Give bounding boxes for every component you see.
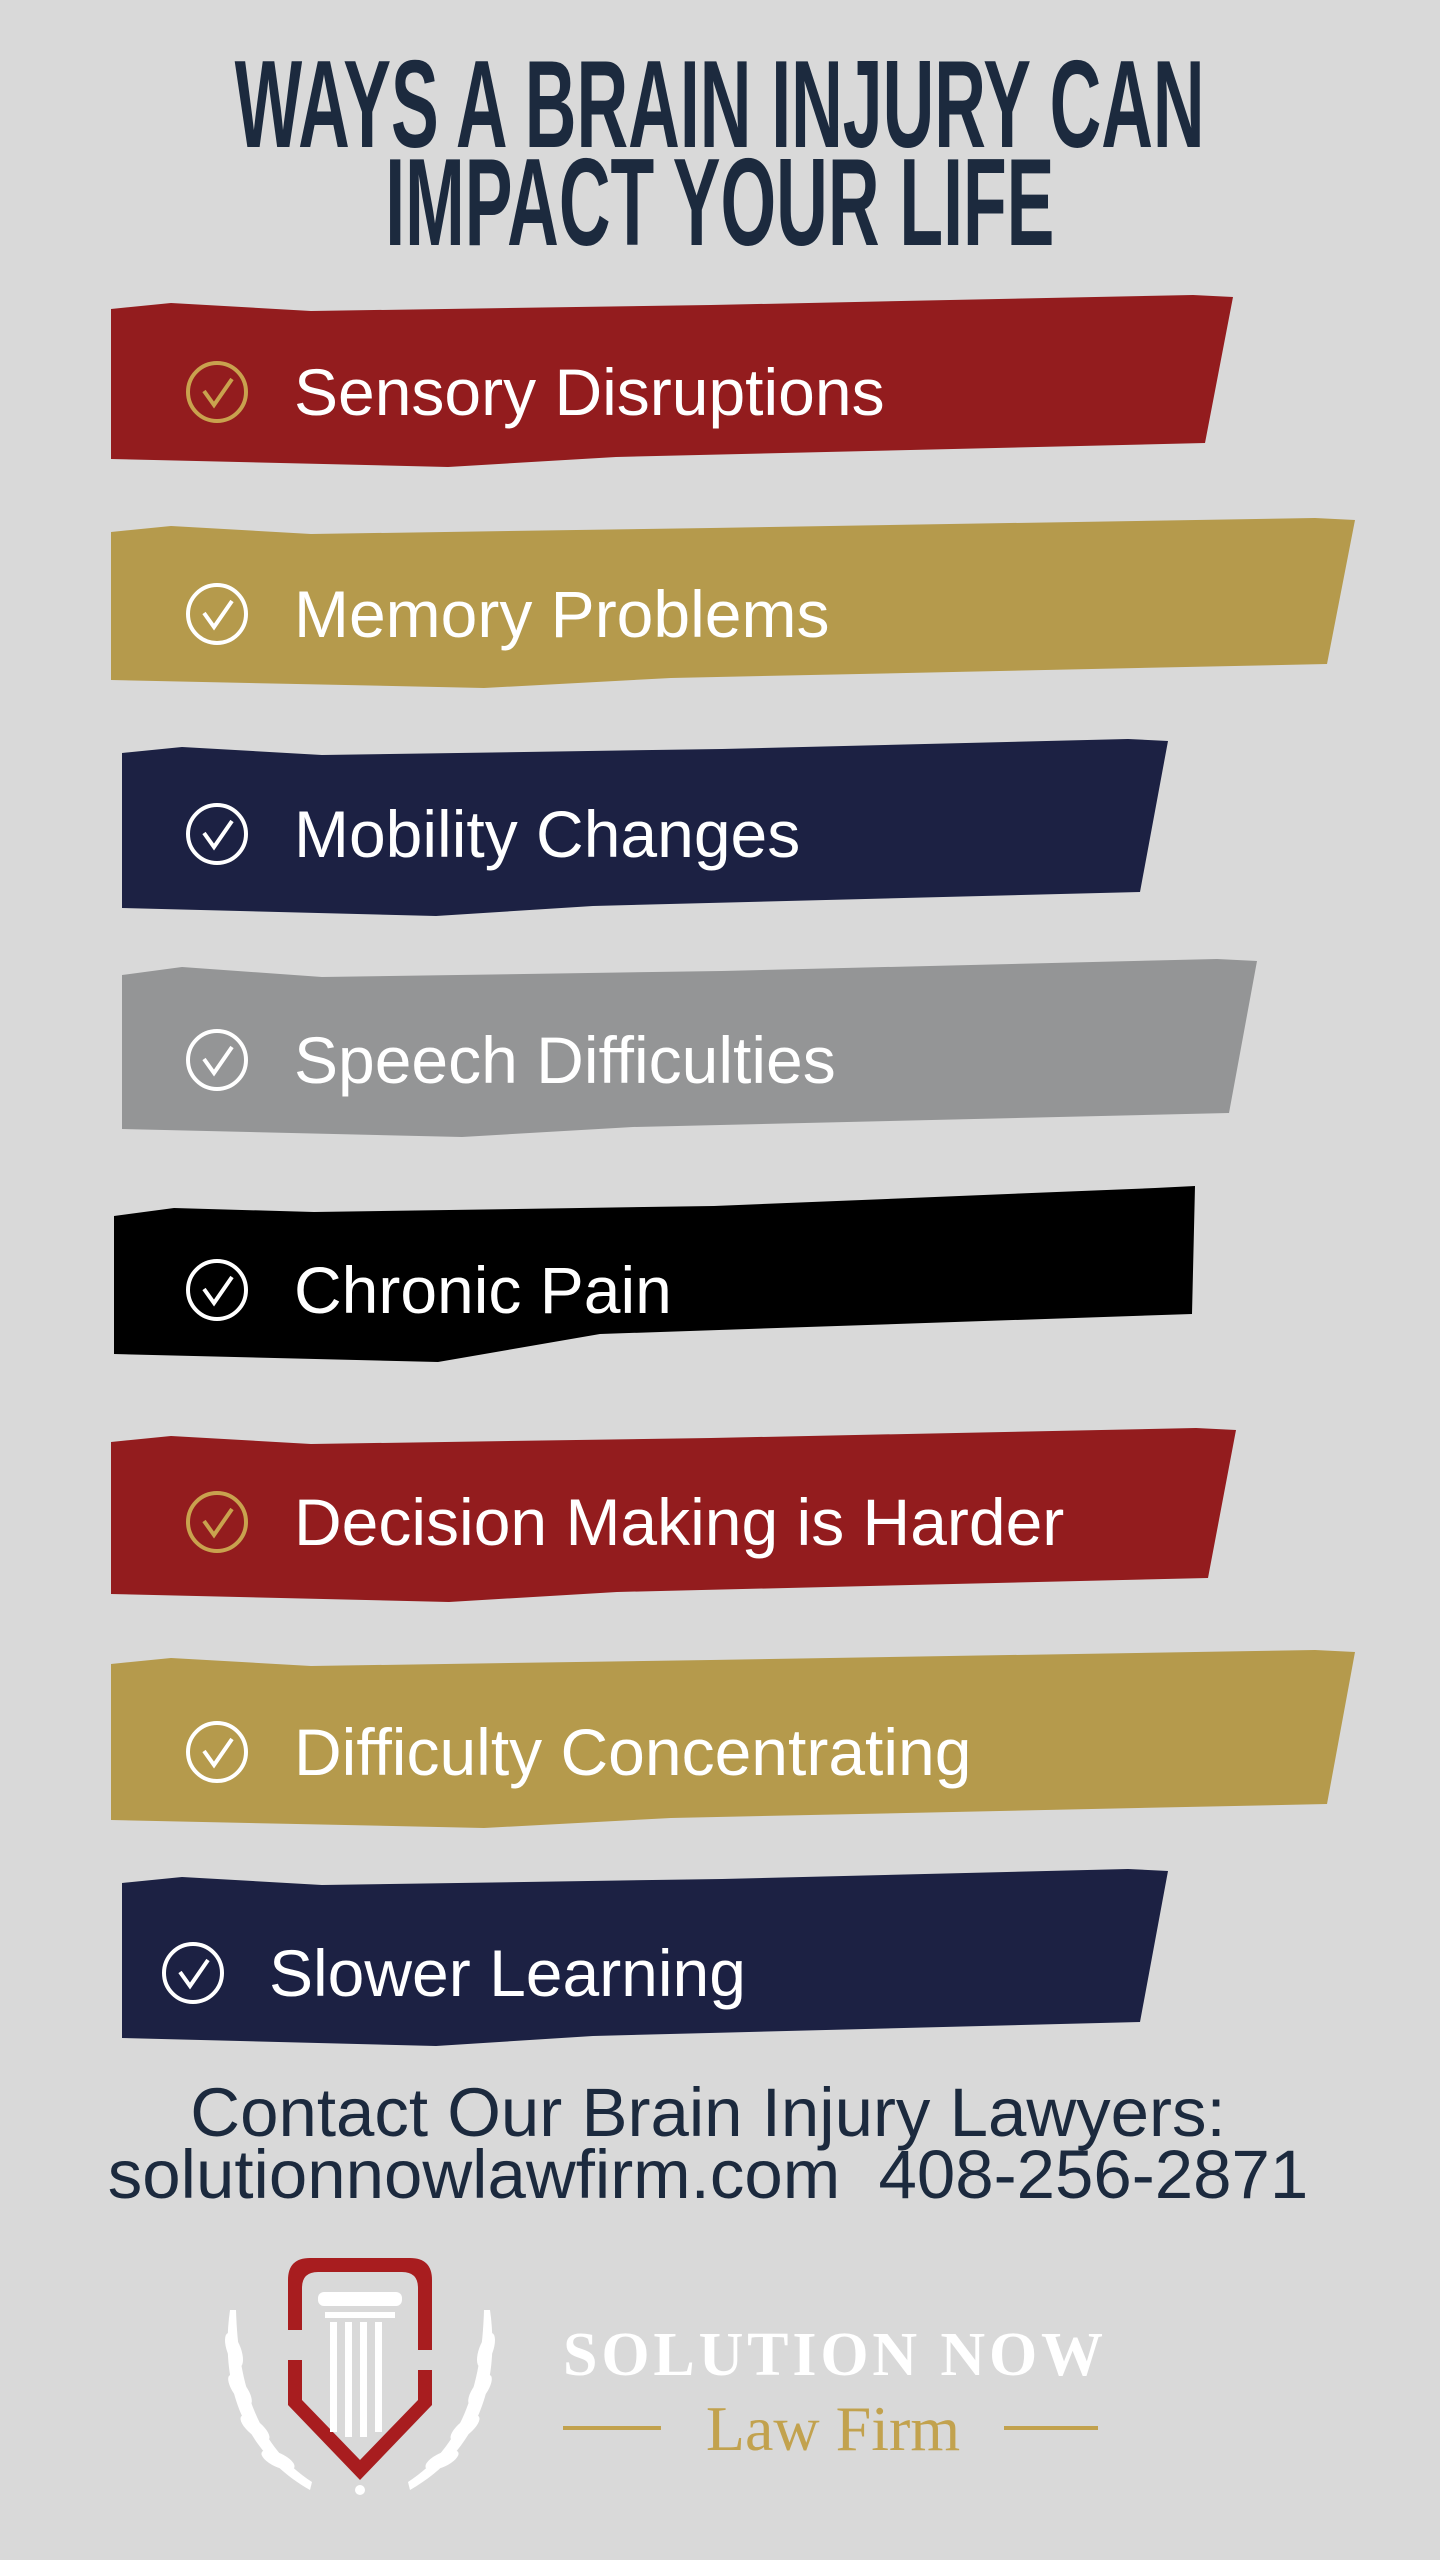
icon: shield — [288, 2258, 432, 2480]
logo — [225, 2258, 1103, 2495]
bar: Chronic Pain — [114, 1186, 1195, 1362]
bar: Decision Making is Harder — [111, 1428, 1236, 1602]
icon: check circle — [188, 1493, 246, 1551]
bar: Sensory Disruptions — [111, 295, 1233, 467]
title: IMPACT YOUR LIFE — [385, 134, 1055, 272]
title — [234, 36, 1205, 272]
label: Decision Making is Harder — [294, 1485, 1064, 1559]
icon: check circle — [188, 363, 246, 421]
label: Slower Learning — [269, 1936, 746, 2010]
contact text — [108, 2074, 1308, 2213]
label: Memory Problems — [294, 577, 829, 651]
label: Mobility Changes — [294, 797, 800, 871]
firm subtitle: Law Firm — [706, 2393, 960, 2464]
title: WAYS A BRAIN INJURY CAN — [235, 36, 1205, 174]
bar: Slower Learning — [122, 1869, 1168, 2046]
icon: check circle — [164, 1944, 222, 2002]
bar: Memory Problems — [111, 518, 1355, 688]
icon: check circle — [188, 1031, 246, 1089]
icon: check circle — [188, 585, 246, 643]
contact text: Contact Our Brain Injury Lawyers: — [190, 2074, 1226, 2151]
firm subtitle — [563, 2393, 1098, 2464]
contact text: solutionnowlawfirm.com 408-256-2871 — [108, 2136, 1308, 2213]
label: Sensory Disruptions — [294, 355, 885, 429]
bar: Speech Difficulties — [122, 959, 1257, 1137]
label: Chronic Pain — [294, 1253, 672, 1327]
bar: Difficulty Concentrating — [111, 1650, 1355, 1828]
icon: check circle — [188, 1261, 246, 1319]
icon: check circle — [188, 805, 246, 863]
label: Speech Difficulties — [294, 1023, 836, 1097]
label: Difficulty Concentrating — [294, 1715, 971, 1789]
icon: laurel wreath — [221, 2310, 499, 2495]
bar: Mobility Changes — [122, 739, 1168, 916]
firm name: SOLUTION NOW — [563, 2321, 1103, 2389]
icon: check circle — [188, 1723, 246, 1781]
